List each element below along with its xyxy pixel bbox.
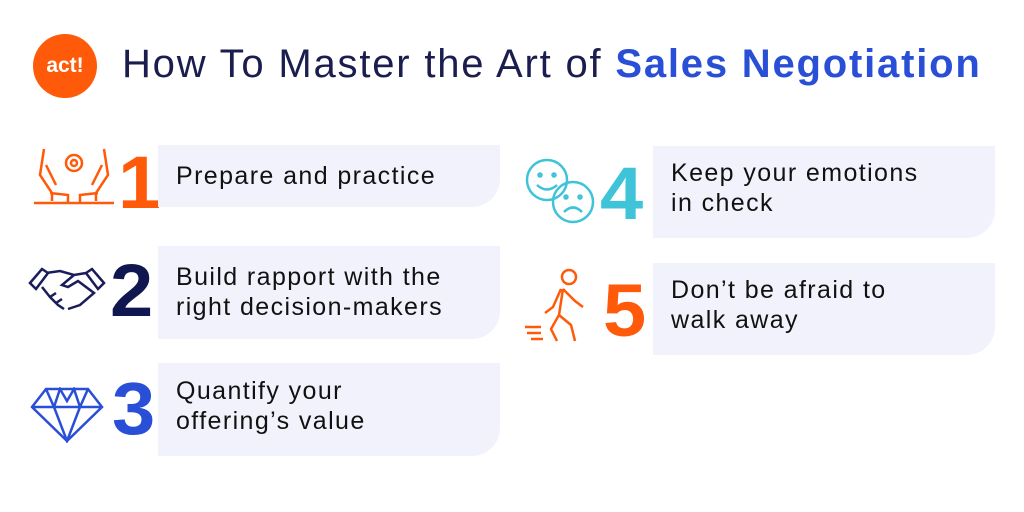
item 2 — [28, 246, 500, 339]
item 3 — [30, 363, 500, 456]
panel 5 — [653, 263, 995, 355]
number 1: 1 — [118, 141, 161, 224]
title: How To Master the Art of Sales Negotiation — [122, 42, 982, 86]
number 3: 3 — [112, 367, 155, 450]
panel 3: Quantify your — [176, 377, 343, 405]
panel 1: Prepare and practice — [176, 162, 436, 190]
panel 4: Keep your emotions — [671, 159, 919, 187]
panel 5: walk away — [671, 306, 799, 334]
panel 2: Build rapport with the — [176, 263, 442, 291]
panel 3: offering’s value — [176, 407, 366, 435]
panel 4: in check — [671, 189, 774, 217]
item 4 — [526, 146, 995, 238]
item 5 — [525, 263, 995, 355]
icon: happy and sad faces — [526, 158, 594, 224]
icon: walking person — [525, 268, 584, 342]
panel 4 — [653, 146, 995, 238]
icon: diamond — [30, 387, 104, 443]
panel 5: Don’t be afraid to — [671, 276, 887, 304]
number 5: 5 — [603, 269, 646, 352]
number 2: 2 — [110, 249, 153, 332]
panel 2: right decision-makers — [176, 293, 443, 321]
panel 1 — [158, 145, 500, 207]
item 1 — [34, 141, 500, 224]
icon: hands with gear — [34, 148, 114, 204]
panel 3 — [158, 363, 500, 456]
icon: handshake — [28, 267, 106, 310]
logo — [33, 34, 97, 98]
panel 2 — [158, 246, 500, 339]
number 4: 4 — [600, 152, 643, 235]
logo: act! — [46, 54, 84, 77]
